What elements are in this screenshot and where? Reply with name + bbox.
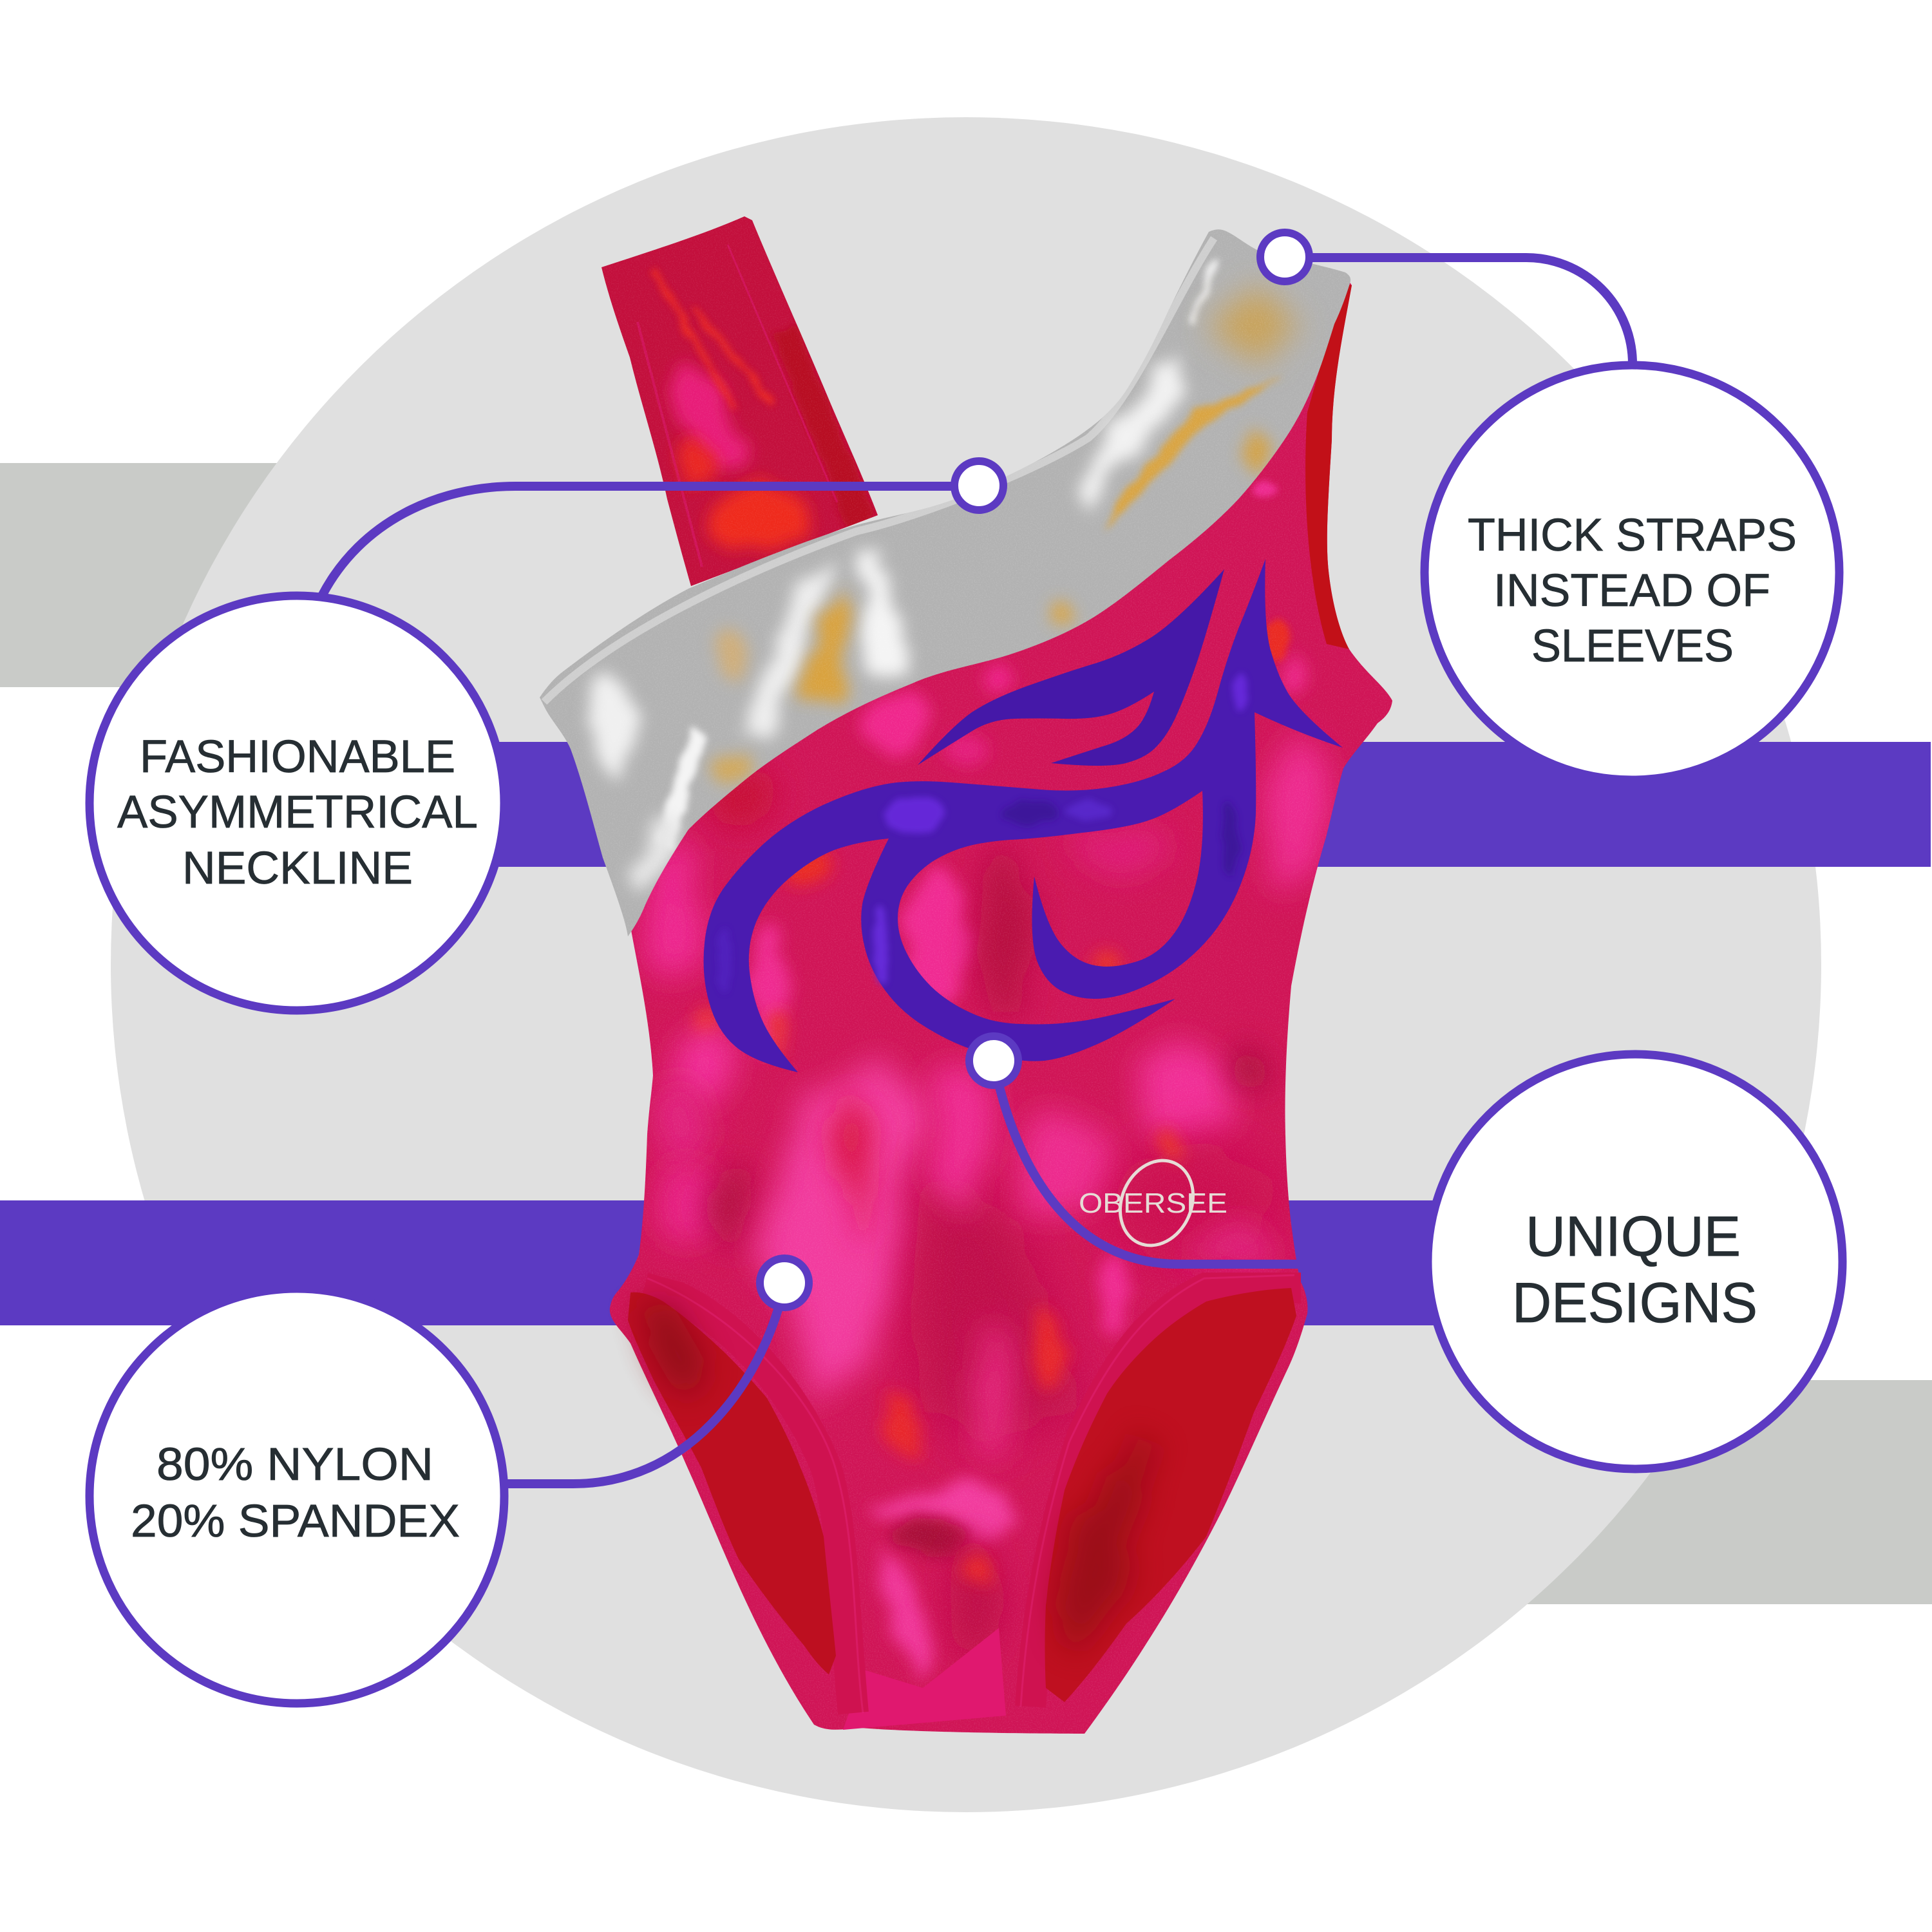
marker dot: design (969, 1036, 1018, 1085)
left leg opening lining (628, 1293, 836, 1674)
callout: thick straps (1425, 365, 1839, 780)
callout: thick straps: SLEEVES (1531, 621, 1734, 672)
body sheen and highlights (580, 258, 1417, 1752)
applique: trunk, ribbon and swirl (704, 559, 1343, 1072)
right leg opening lining (1045, 1288, 1296, 1702)
decorative grey band left (0, 463, 451, 687)
connector: unique designs (994, 1061, 1307, 1264)
callout: fabric composition: 80% NYLON (156, 1439, 433, 1490)
callout: thick straps: THICK STRAPS (1468, 510, 1797, 561)
connector: thick straps (1285, 258, 1633, 364)
marker dot: strap (1260, 232, 1309, 281)
purple band lower (0, 1200, 1546, 1325)
upper body glow (862, 697, 934, 752)
large grey background circle (111, 117, 1821, 1812)
connector: fabric composition (506, 1285, 784, 1484)
lower body (880, 1397, 919, 1454)
leotard back strap (601, 216, 878, 586)
purple band upper (496, 742, 1931, 867)
applique sheen (717, 673, 1247, 992)
crotch lining panel (843, 1628, 1006, 1730)
callout: fabric composition (90, 1289, 504, 1703)
callout: asymmetrical neckline: FASHIONABLE (140, 732, 455, 782)
leg seam bands (644, 1275, 1301, 1713)
connector: asymmetrical neckline (322, 486, 979, 596)
callout: asymmetrical neckline (90, 596, 504, 1010)
callout: asymmetrical neckline: ASYMMETRICAL (117, 787, 478, 838)
mid body folds (673, 1030, 737, 1102)
brand logo: OBERSEE: OBERSEE (1079, 1188, 1227, 1219)
red strap seam at right armhole (1305, 283, 1352, 649)
callout: thick straps: INSTEAD OF (1493, 565, 1770, 616)
brand logo: OBERSEE (1079, 1149, 1227, 1257)
purple applique (704, 559, 1343, 1072)
applique: upper leaf (918, 569, 1224, 766)
callout: unique designs: DESIGNS (1512, 1271, 1757, 1334)
leotard product illustration (528, 206, 1417, 1752)
leotard body (610, 273, 1392, 1734)
right leg shadow (1044, 1433, 1165, 1658)
decorative grey band right (1417, 1380, 1932, 1604)
callout: unique designs (1428, 1054, 1842, 1469)
callout: fabric composition: 20% SPANDEX (131, 1496, 460, 1547)
marker dot: neckline (954, 461, 1003, 510)
marker dot: fabric (760, 1258, 809, 1307)
callout: asymmetrical neckline: NECKLINE (182, 843, 413, 894)
left leg shadow (632, 1296, 714, 1396)
silver neckline panel (528, 219, 1365, 947)
callout: unique designs: UNIQUE (1526, 1204, 1741, 1268)
